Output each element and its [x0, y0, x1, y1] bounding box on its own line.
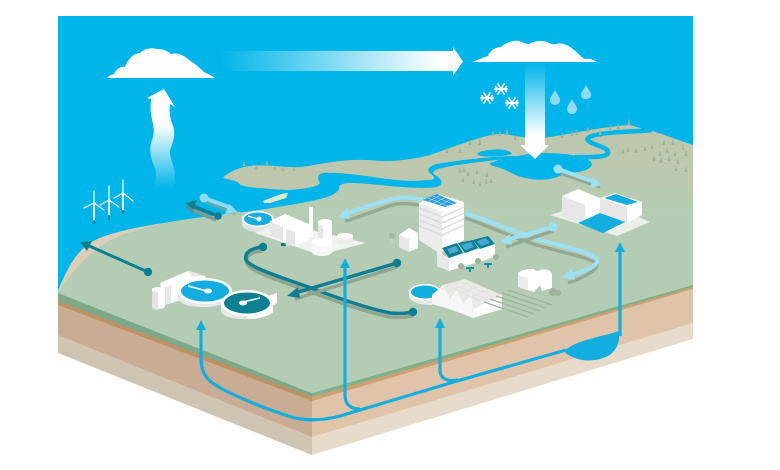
ground layers: soil cross-section	[58, 284, 693, 455]
trees	[243, 118, 688, 186]
arrow: discharge from wastewater plant to sea	[80, 241, 152, 276]
pale blue pipe: to agriculture	[465, 213, 597, 283]
pond	[477, 149, 512, 157]
icon: raindrops	[550, 85, 591, 114]
icon: snowflakes	[481, 84, 518, 108]
groundwater pipe to treatment plant	[615, 242, 625, 336]
office tower	[419, 194, 464, 255]
lake	[490, 153, 592, 180]
row houses with solar roofs	[437, 236, 495, 271]
arrow: river intake	[200, 194, 238, 214]
pale blue pipe: to town	[500, 222, 558, 247]
trees and tractors near houses	[389, 233, 499, 272]
hills and island	[223, 125, 657, 190]
cloud right	[473, 41, 597, 62]
groundwater pipe to wastewater plant	[196, 320, 566, 420]
groundwater pipe to greenhouses	[435, 318, 458, 381]
arrow: evaporation	[147, 89, 175, 188]
crop field	[484, 290, 552, 317]
beach	[58, 212, 250, 294]
arrow: lake intake	[554, 164, 602, 188]
groundwater aquifer	[564, 331, 619, 360]
pale blue pipe: river water to power plant	[337, 198, 423, 221]
boat	[263, 193, 288, 203]
greenhouses	[432, 279, 502, 318]
small building beside tower	[399, 228, 418, 252]
land surface	[58, 130, 693, 393]
sky and sea background	[58, 16, 693, 306]
arrow: wind transport	[220, 47, 463, 76]
icon: wind turbines	[84, 180, 133, 223]
irrigation pool	[409, 284, 441, 305]
wastewater treatment plant	[152, 271, 277, 319]
teal pipe: to wastewater plant	[287, 259, 401, 299]
arrow: discharge to sea	[185, 200, 222, 220]
arrow: precipitation	[520, 62, 549, 159]
stream to the sea	[575, 130, 652, 157]
power plant	[255, 207, 366, 256]
groundwater pipe to power plant	[340, 258, 360, 409]
clarifier at power plant	[242, 211, 274, 232]
water treatment plant	[550, 189, 650, 236]
teal pipe: effluent from power plant to greenhouse	[246, 243, 417, 317]
farm silos	[518, 269, 561, 296]
cloud left	[107, 48, 215, 78]
